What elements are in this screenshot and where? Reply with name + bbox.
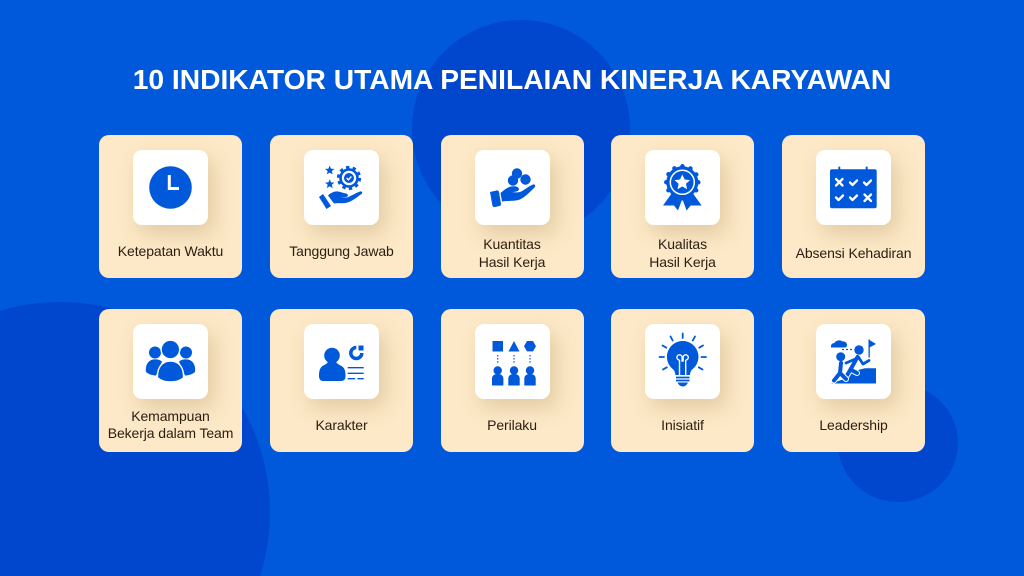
icon: shapes mapped to people (474, 324, 550, 398)
icon: clock (133, 150, 208, 225)
label: Kemampuan Bekerja dalam Team: Bekerja dalam Team (108, 425, 233, 441)
icon: hand holding circles (474, 150, 550, 225)
label: Ketepatan Waktu: Ketepatan Waktu (118, 243, 223, 259)
background circle: top (412, 20, 630, 238)
panel: Kemampuan Bekerja dalam Team (99, 308, 242, 452)
label: Perilaku: Perilaku (487, 416, 537, 432)
label: Kemampuan Bekerja dalam Team: Kemampuan (131, 408, 210, 424)
label: Kualitas Hasil Kerja: Hasil Kerja (649, 254, 716, 270)
title: 10 INDIKATOR UTAMA PENILAIAN KINERJA KARYAWAN (133, 63, 891, 95)
label: Absensi Kehadiran: Absensi Kehadiran (796, 244, 911, 260)
panel: Inisiatif (611, 308, 754, 452)
label: Leadership: Leadership (819, 416, 888, 432)
label: Kuantitas Hasil Kerja (479, 236, 546, 270)
panel: Absensi Kehadiran (782, 135, 925, 278)
label: Karakter: Karakter (315, 416, 368, 432)
background circle: bottom left (0, 302, 270, 576)
icon: team of people (133, 324, 208, 398)
icon: light bulb (645, 324, 720, 398)
panel: Karakter (270, 308, 413, 452)
icon: hand with gear and stars (304, 150, 379, 225)
panel: Ketepatan Waktu (99, 135, 242, 278)
label: Kuantitas Hasil Kerja: Kuantitas (483, 236, 541, 252)
background circle: bottom right (838, 384, 958, 502)
icon: climbers with flag (816, 324, 891, 398)
label: Kemampuan Bekerja dalam Team (108, 408, 233, 441)
label: Kualitas Hasil Kerja: Kualitas (658, 236, 707, 252)
icon: attendance calendar (816, 150, 891, 225)
panel: Perilaku (440, 308, 584, 452)
panel: Leadership (782, 308, 925, 452)
label: Kualitas Hasil Kerja (649, 236, 716, 270)
panel: Kualitas Hasil Kerja (611, 135, 754, 278)
label: Tanggung Jawab: Tanggung Jawab (289, 243, 394, 259)
label: Inisiatif: Inisiatif (661, 416, 704, 432)
icon: person profile with chart (304, 324, 379, 398)
label: Kuantitas Hasil Kerja: Hasil Kerja (479, 254, 545, 270)
icon: rosette badge (645, 150, 720, 225)
panel: Kuantitas Hasil Kerja (440, 135, 584, 278)
panel: Tanggung Jawab (270, 135, 413, 278)
